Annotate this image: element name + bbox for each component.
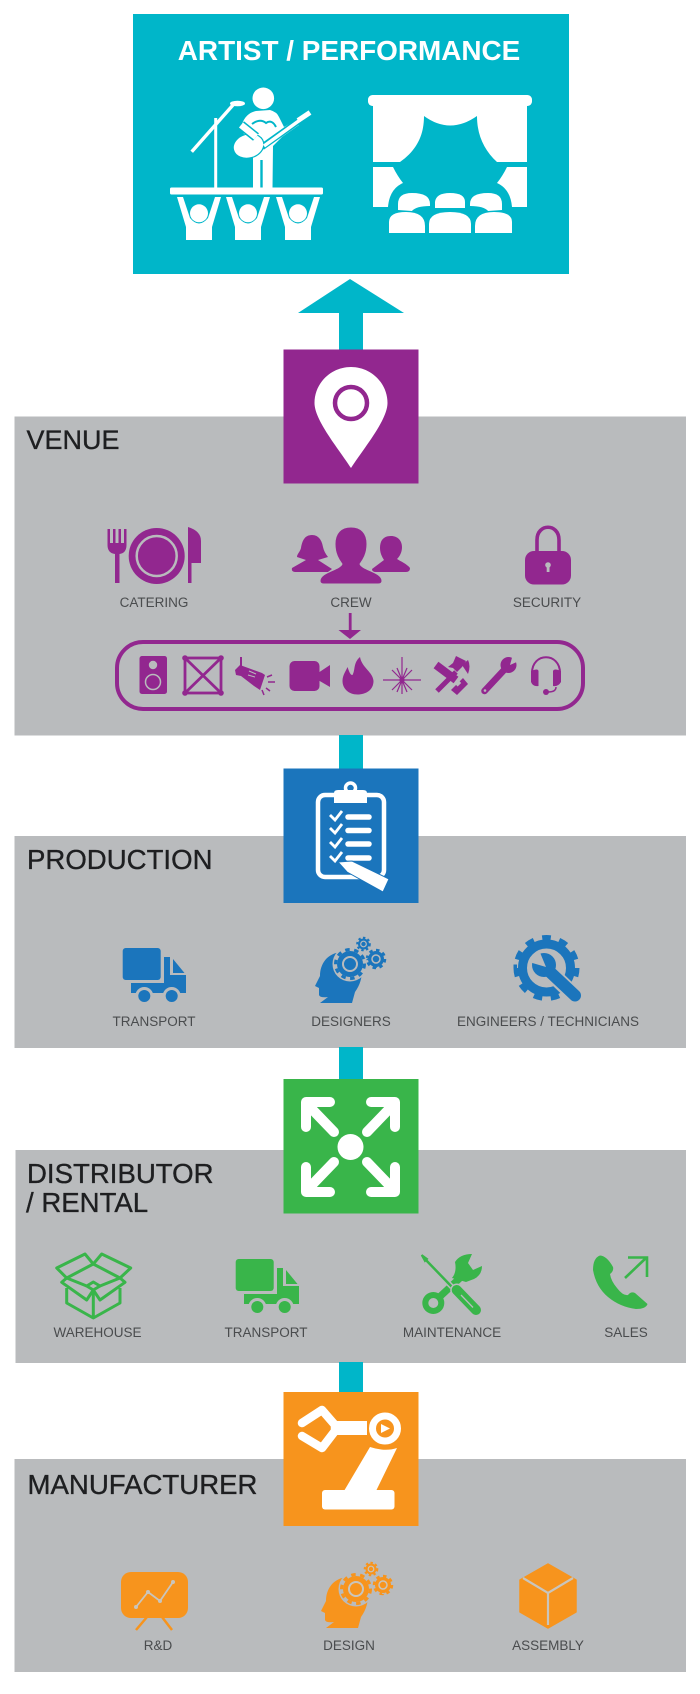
label: sales: SALES <box>604 1325 648 1340</box>
label: assembly: ASSEMBLY <box>512 1638 584 1653</box>
icon block: clipboard <box>284 768 418 903</box>
label: R&D: R&D <box>144 1638 172 1653</box>
icon: laser <box>383 657 421 694</box>
icon: designers head with gears <box>315 938 385 1003</box>
label: maintenance: MAINTENANCE <box>403 1325 501 1340</box>
icon block: distribution arrows <box>284 1079 418 1214</box>
icon: speaker <box>140 656 167 694</box>
label: designers: DESIGNERS <box>311 1014 391 1029</box>
connector: distributor to production <box>339 1047 363 1080</box>
icon: sales phone <box>593 1256 648 1309</box>
heading: distributor / rental: / RENTAL <box>26 1187 148 1218</box>
icon: transport truck <box>236 1259 299 1316</box>
icon: headset <box>531 657 561 695</box>
icon: R&D chart <box>121 1572 188 1630</box>
panel: venue <box>14 350 686 736</box>
label: crew: CREW <box>330 595 372 610</box>
heading: venue: VENUE <box>26 425 120 455</box>
icon: stage light <box>235 657 275 695</box>
icon: theatre stage and seats <box>368 95 532 233</box>
icon: maintenance tools <box>422 1254 482 1314</box>
icon: truss <box>182 655 224 696</box>
icon: pyro flame <box>342 657 374 694</box>
panel: manufacturer <box>14 1392 686 1672</box>
panel: artist / performance <box>133 14 569 274</box>
icon block: robot arm <box>284 1392 418 1526</box>
connector: production to venue <box>339 735 363 769</box>
icon: crew <box>292 527 410 584</box>
label: catering: CATERING <box>120 595 188 610</box>
icon: video camera <box>290 661 330 691</box>
heading: manufacturer: MANUFACTURER <box>28 1469 257 1500</box>
icon block: location pin <box>284 350 418 484</box>
icon: assembly cube <box>520 1564 576 1628</box>
icon: performer on stage with crowd <box>170 88 323 240</box>
icon: engineers gear and wrench <box>517 938 576 998</box>
label: design: DESIGN <box>323 1638 375 1653</box>
icon: warehouse box <box>57 1254 131 1318</box>
connector: manufacturer to distributor <box>339 1362 363 1393</box>
label: security: SECURITY <box>513 595 581 610</box>
icon: wrench <box>484 654 519 692</box>
label: warehouse: WAREHOUSE <box>53 1325 142 1340</box>
heading: distributor / rental <box>26 1158 214 1218</box>
label: transport: TRANSPORT <box>112 1014 196 1029</box>
icon: design head with gears <box>321 1563 392 1628</box>
icon: rigging tools <box>436 656 470 695</box>
icon: catering <box>108 527 201 584</box>
icon: security <box>525 527 571 584</box>
group: crew specialisms <box>117 642 583 709</box>
panel: production <box>14 768 686 1048</box>
label: transport: TRANSPORT <box>224 1325 308 1340</box>
icon: transport truck <box>123 948 186 1005</box>
heading: distributor / rental: DISTRIBUTOR <box>27 1158 214 1189</box>
heading: production: PRODUCTION <box>27 844 212 875</box>
panel: distributor / rental <box>16 1079 686 1363</box>
label: engineers / technicians: ENGINEERS / TECHNICIANS <box>457 1014 639 1029</box>
arrow: crew to specialists <box>338 613 361 639</box>
title: ARTIST / PERFORMANCE <box>178 35 520 66</box>
arrow: up to artist <box>298 279 404 350</box>
